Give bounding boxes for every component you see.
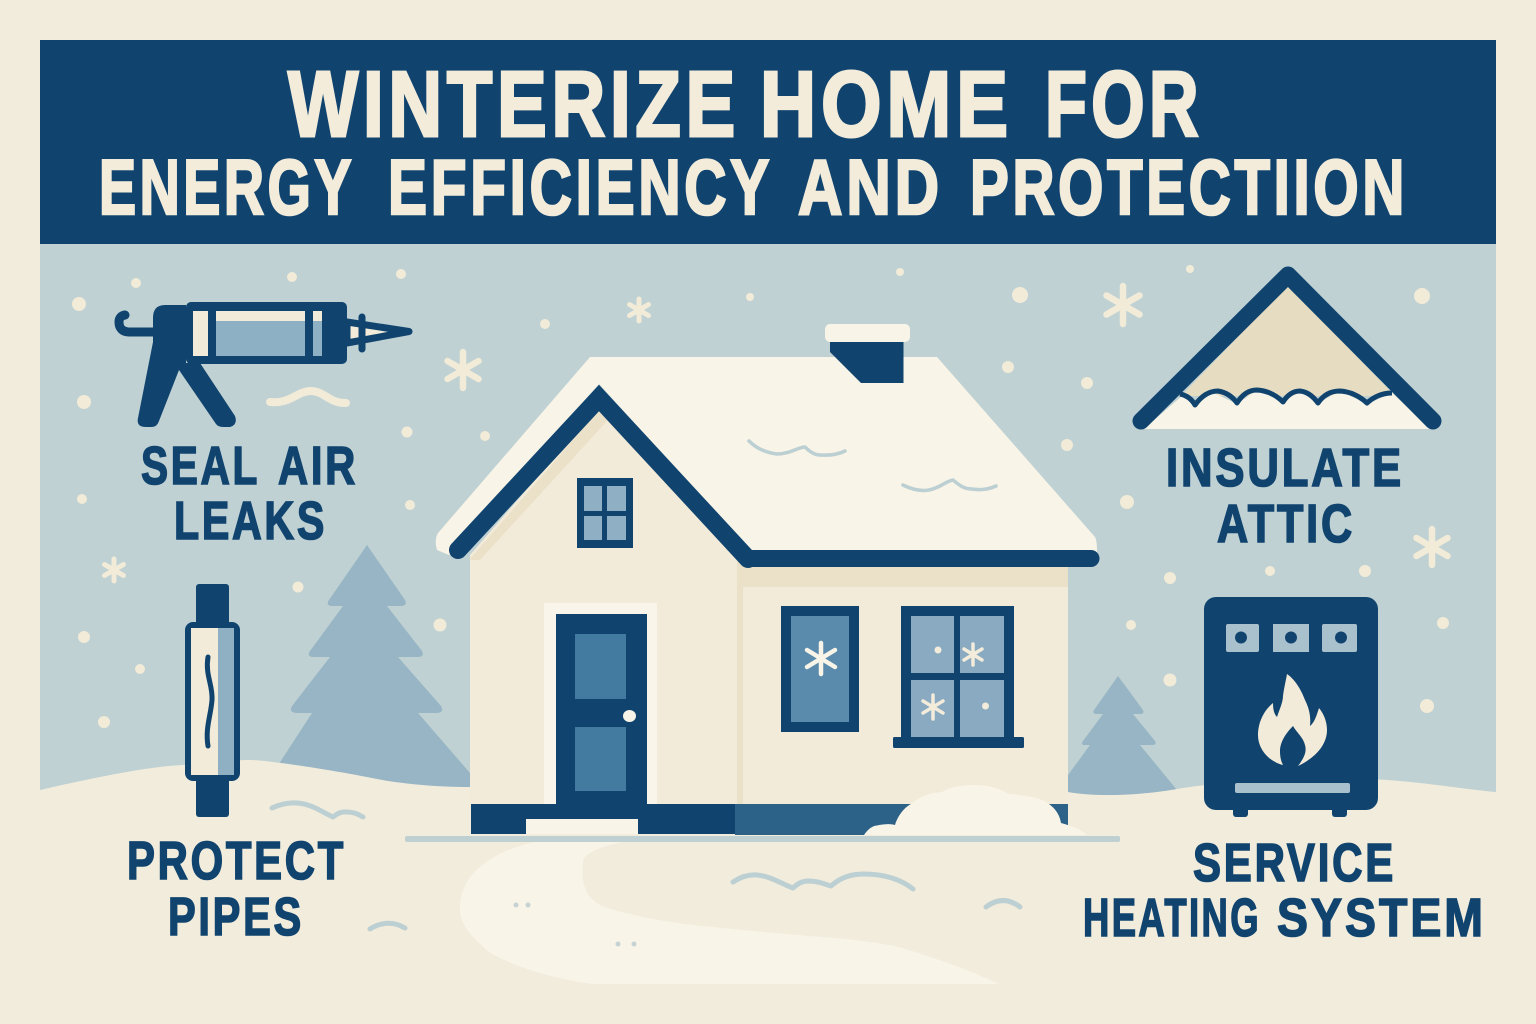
wall shading [469,409,1068,804]
label: service heating system [1083,833,1486,948]
title line two: AND [798,143,943,231]
title line one: WINTERIZE [288,52,740,156]
chimney [825,324,910,383]
icon: pipe with insulation sleeve [185,584,240,817]
winding snow path [460,841,998,984]
label: seal air leaks [141,436,358,551]
left pine tree [262,545,470,790]
label: service heating system: SERVICE [1193,833,1396,893]
house walls [470,405,1068,804]
panel: winter sky [40,244,1496,804]
label: protect pipes [127,831,346,947]
house [436,324,1097,835]
title line one [288,52,1203,156]
snow mound [864,785,1087,835]
front door [544,603,657,809]
label: insulate attic: INSULATE [1166,438,1404,498]
label: seal air leaks: AIR [278,436,358,496]
snowy ground [40,760,1496,1024]
path pebbles [514,902,636,946]
icon: attic insulation [1141,275,1433,429]
snowfall dots [72,265,1449,728]
label: service heating system: SYSTEM [1277,888,1486,948]
snowy roof [436,357,1097,555]
title line one: FOR [1045,52,1203,156]
label: seal air leaks: LEAKS [174,491,327,551]
roof snow drifts [749,441,996,490]
icon: furnace [1204,597,1378,817]
ground line [405,836,1120,842]
snowflakes in the sky [104,286,1448,581]
foundation [471,804,1068,835]
icon: caulk gun [119,302,409,427]
label: protect pipes: PROTECT [127,831,346,891]
ground snow marks [272,803,1020,929]
label: protect pipes: PIPES [168,887,304,947]
window with snowflake [781,606,859,732]
caulk bead [270,391,346,403]
label: insulate attic: ATTIC [1217,494,1355,554]
label: insulate attic [1166,438,1404,554]
label: seal air leaks: SEAL [141,436,260,496]
gable window [577,478,633,548]
title line two: ENERGY [99,143,355,231]
label: service heating system: HEATING [1083,888,1261,948]
title line two: EFFICIENCY [388,143,773,231]
double window [893,606,1024,748]
title line two [99,143,1408,231]
title line one: HOME [760,52,1013,156]
right pine tree [1060,676,1177,800]
roof trim [458,398,1091,559]
title banner [40,40,1496,244]
